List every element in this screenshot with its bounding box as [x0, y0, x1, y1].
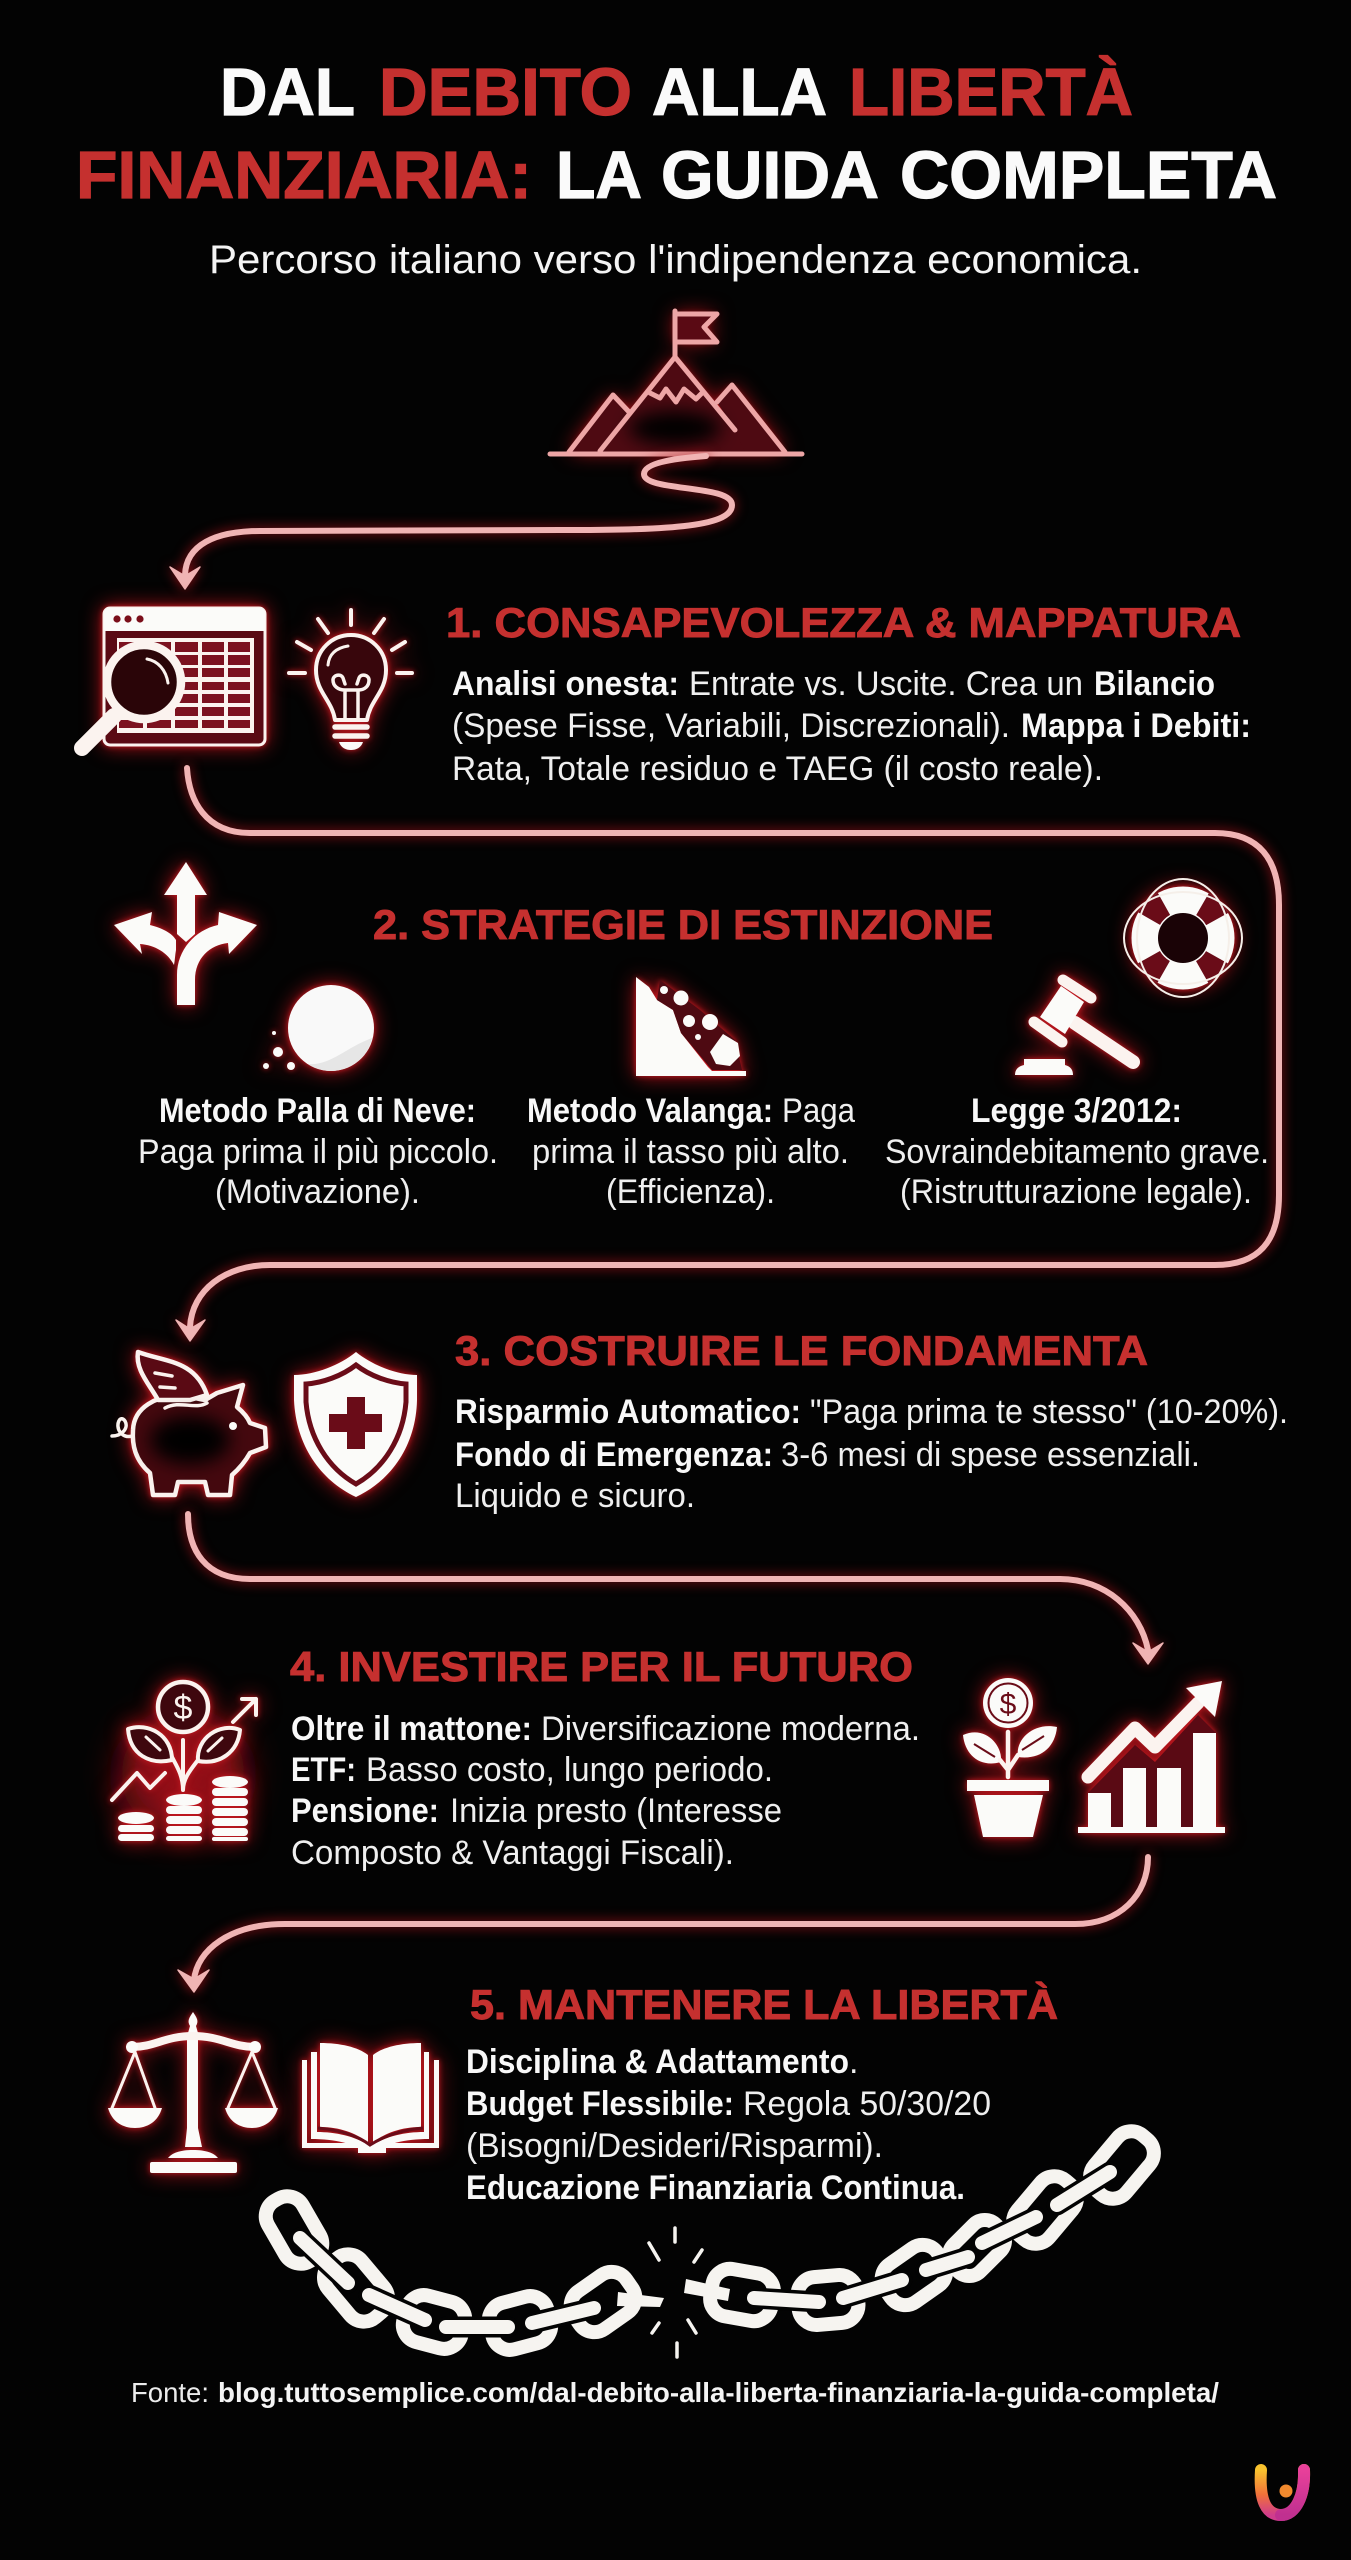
heading: step 4: 4. INVESTIRE PER IL FUTURO: [290, 1643, 913, 1690]
text: Legge 3/2012: Sovraindebitamento grave.: [885, 1133, 1269, 1171]
icon: flying piggy bank: [112, 1352, 266, 1495]
icon: balance scales: [108, 2012, 278, 2173]
text: Legge 3/2012: Legge 3/2012:: [971, 1092, 1182, 1130]
text: step 1 body: Entrate vs. Uscite. Crea un: [689, 665, 1083, 703]
icon: lifebuoy: [1124, 879, 1242, 997]
arrow: step 1 to step 3 around step 2: [176, 768, 1279, 1341]
icon: shield with cross: [294, 1352, 417, 1497]
title: [76, 55, 1277, 213]
text: step 5 body: Regola 50/30/20: [743, 2085, 991, 2123]
text: step 1 body: Bilancio: [1094, 665, 1215, 703]
text: snowball method: [138, 1092, 498, 1211]
text: snowball method: Metodo Palla di Neve:: [159, 1092, 476, 1130]
title: GUIDA: [661, 138, 879, 213]
title: LIBERTÀ: [849, 55, 1133, 130]
arrow: step 3 to step 4: [188, 1514, 1163, 1664]
text: step 5 body: Educazione Finanziaria Continua.: [466, 2169, 965, 2207]
column: avalanche method: [527, 977, 855, 1211]
text: avalanche method: Paga: [782, 1092, 855, 1130]
icon: light bulb: [289, 610, 412, 750]
title: ALLA: [652, 55, 827, 130]
text: step 3 body: Liquido e sicuro.: [455, 1477, 695, 1515]
text: step 1 body: Rata, Totale residuo e TAEG (il costo reale).: [452, 750, 1103, 788]
text: step 4 body: [291, 1710, 920, 1872]
icon: spreadsheet with magnifier: [82, 608, 265, 748]
text: avalanche method: (Efficienza).: [606, 1173, 775, 1211]
icon: potted money plant: [963, 1678, 1057, 1837]
icon: potted money plant: $: [1000, 1688, 1017, 1721]
text: step 1 body: Mappa i Debiti:: [1021, 707, 1251, 745]
heading: step 3: 3. COSTRUIRE LE FONDAMENTA: [455, 1327, 1148, 1374]
text: step 1 body: [452, 665, 1251, 788]
text: step 4 body: Diversificazione moderna.: [541, 1710, 920, 1748]
text: Legge 3/2012: (Ristrutturazione legale).: [900, 1173, 1252, 1211]
source line: Fonte:: [131, 2377, 209, 2408]
icon: gavel: [1015, 980, 1133, 1075]
text: step 3 body: "Paga prima te stesso" (10-20%).: [810, 1393, 1288, 1431]
text: step 1 body: Analisi onesta:: [452, 665, 679, 703]
arrow: step 4 to step 5: [178, 1857, 1148, 1992]
heading: step 2: 2. STRATEGIE DI ESTINZIONE: [373, 901, 993, 948]
text: step 3 body: Risparmio Automatico:: [455, 1393, 801, 1431]
icon: mountain with flag: [550, 311, 802, 454]
title: LA: [556, 138, 642, 213]
panel: step 5: [108, 1981, 1058, 2207]
source line: blog.tuttosemplice.com/dal-debito-alla-liberta-finanziaria-la-guida-completa/: [218, 2377, 1219, 2408]
panel: step 2: [114, 862, 1269, 1211]
text: step 3 body: [455, 1393, 1288, 1515]
icon: snowball: [263, 985, 374, 1071]
title: FINANZIARIA:: [76, 138, 532, 213]
column: Legge 3/2012: [885, 980, 1269, 1211]
icon: avalanche: [636, 977, 746, 1076]
panel: step 4: [112, 1643, 1225, 1872]
text: step 4 body: Inizia presto (Interesse: [450, 1792, 782, 1830]
text: step 5 body: .: [849, 2043, 858, 2081]
icon: broken chain: [259, 2124, 1161, 2357]
text: step 4 body: Pensione:: [291, 1792, 439, 1830]
column: snowball method: [138, 985, 498, 1211]
text: step 5 body: [466, 2043, 991, 2207]
title: DAL: [220, 55, 355, 130]
text: avalanche method: Metodo Valanga:: [527, 1092, 773, 1130]
text: step 1 body: (Spese Fisse, Variabili, Discrezionali).: [452, 707, 1010, 745]
title: COMPLETA: [900, 138, 1277, 213]
title: DEBITO: [379, 55, 632, 130]
icon: money plant with coins: [112, 1682, 256, 1841]
text: step 4 body: Oltre il mattone:: [291, 1710, 532, 1748]
text: step 3 body: 3-6 mesi di spese essenziali.: [781, 1436, 1200, 1474]
heading: step 5: 5. MANTENERE LA LIBERTÀ: [470, 1981, 1058, 2028]
text: step 4 body: Basso costo, lungo periodo.: [366, 1751, 773, 1789]
text: step 4 body: Composto & Vantaggi Fiscali).: [291, 1834, 734, 1872]
text: snowball method: Paga prima il più piccolo.: [138, 1133, 498, 1171]
panel: step 1: [82, 599, 1251, 788]
subtitle: Percorso italiano verso l'indipendenza economica.: [209, 238, 1142, 282]
text: step 5 body: (Bisogni/Desideri/Risparmi).: [466, 2127, 883, 2165]
icon: money plant with coins: $: [174, 1689, 193, 1727]
text: step 5 body: Budget Flessibile:: [466, 2085, 734, 2123]
panel: step 3: [112, 1327, 1288, 1515]
text: snowball method: (Motivazione).: [215, 1173, 420, 1211]
icon: logo: [1261, 2470, 1304, 2515]
heading: step 1: 1. CONSAPEVOLEZZA & MAPPATURA: [446, 599, 1241, 646]
text: avalanche method: [527, 1092, 855, 1211]
text: step 5 body: Disciplina & Adattamento: [466, 2043, 849, 2081]
text: Legge 3/2012: [885, 1092, 1269, 1211]
arrow: road to step 1: [170, 456, 732, 589]
text: avalanche method: prima il tasso più alto.: [532, 1133, 849, 1171]
text: step 3 body: Fondo di Emergenza:: [455, 1436, 773, 1474]
icon: three-way arrows: [114, 862, 257, 1005]
text: step 4 body: ETF:: [291, 1751, 356, 1789]
icon: open book: [302, 2043, 439, 2153]
icon: growth chart: [1078, 1681, 1225, 1833]
